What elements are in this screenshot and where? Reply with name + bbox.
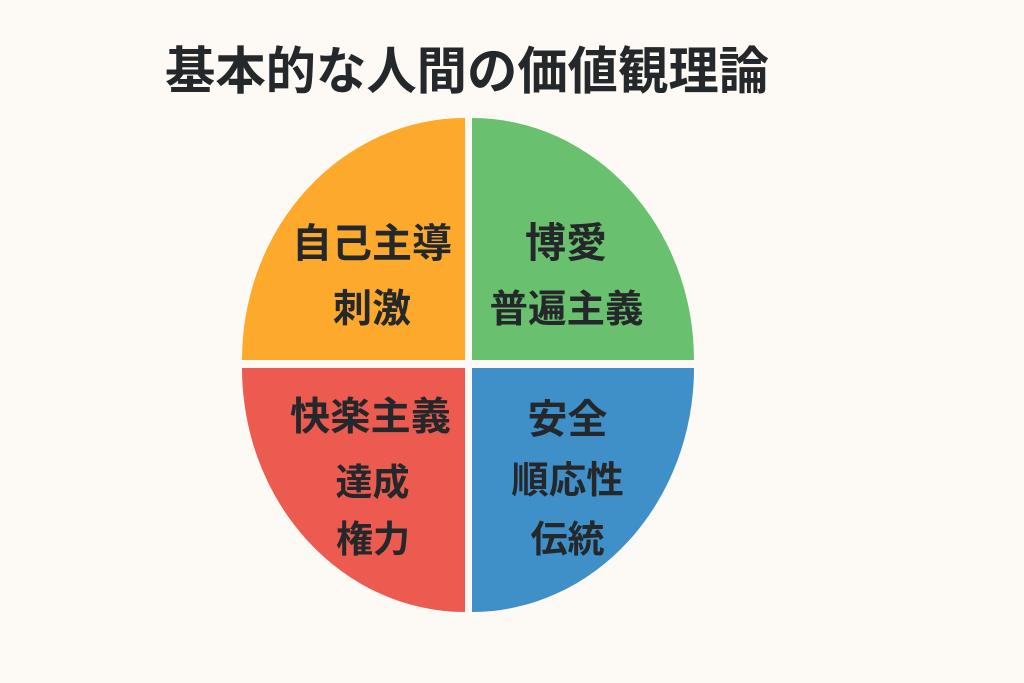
panel: blue quadrant: 伝統 bbox=[530, 519, 604, 560]
panel: blue quadrant bbox=[472, 368, 694, 612]
panel: red quadrant: 達成 bbox=[336, 462, 410, 503]
panel: blue quadrant: 順応性 bbox=[511, 459, 624, 501]
panel: green quadrant: 普遍主義 bbox=[490, 289, 644, 331]
pie chart bbox=[242, 118, 694, 612]
panel: green quadrant: 博愛 bbox=[525, 220, 607, 266]
panel: green quadrant bbox=[472, 118, 694, 360]
panel: red quadrant: 快楽主義 bbox=[290, 396, 451, 439]
panel: orange quadrant: 刺激 bbox=[333, 288, 411, 331]
title: 基本的な人間の価値観理論 bbox=[165, 43, 769, 100]
panel: blue quadrant: 安全 bbox=[528, 398, 608, 442]
panel: orange quadrant: 自己主導 bbox=[292, 222, 452, 266]
panel: orange quadrant bbox=[242, 118, 465, 360]
panel: red quadrant bbox=[242, 368, 465, 612]
panel: red quadrant: 権力 bbox=[336, 519, 410, 560]
